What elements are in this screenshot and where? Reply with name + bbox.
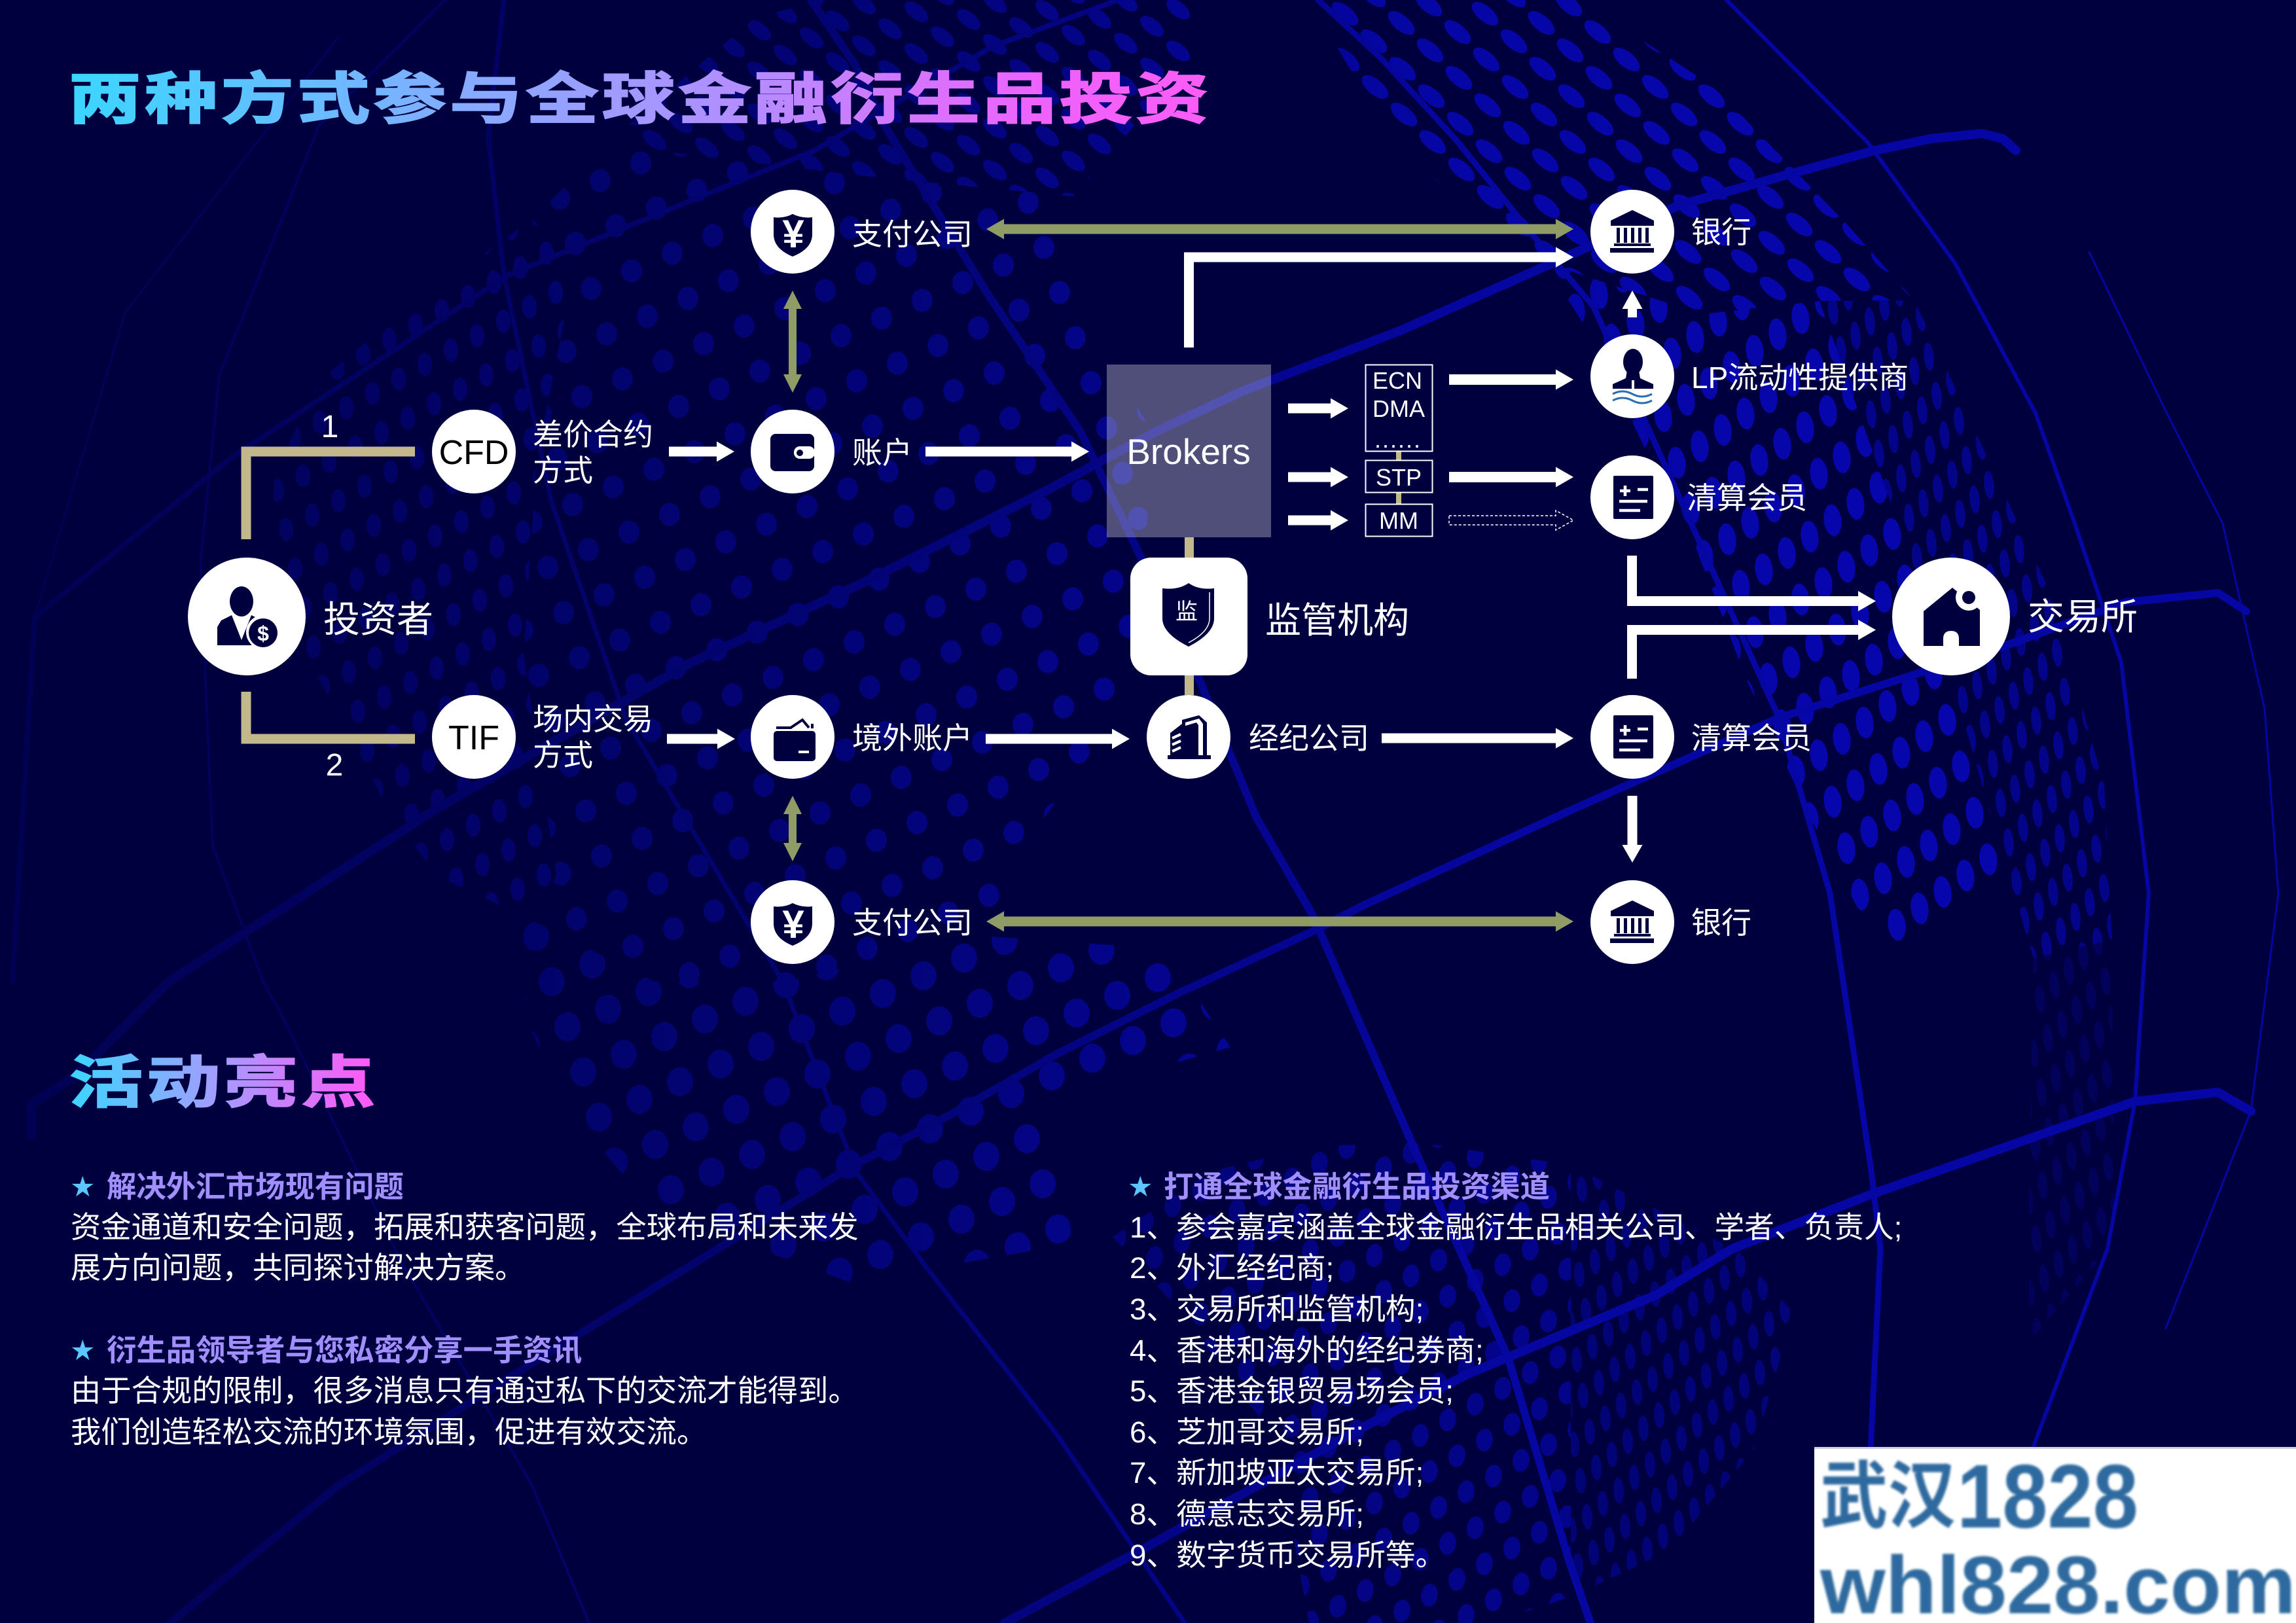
label: brokerage: 经纪公司	[1249, 721, 1369, 755]
node: payment company top: ¥	[782, 212, 804, 256]
node: TIF: TIF	[448, 719, 499, 757]
box: STP: STP	[1376, 464, 1422, 491]
text block: forex market issues: 展方向问题，共同探讨解决方案。	[71, 1251, 525, 1285]
text block: global channel list	[1128, 1170, 1902, 1572]
text block: private sharing	[70, 1334, 859, 1449]
node: payment company bottom: ¥	[782, 902, 804, 946]
label: payment company bottom: 支付公司	[852, 906, 973, 940]
text block: private sharing: 衍生品领导者与您私密分享一手资讯	[107, 1334, 582, 1367]
node: brokerage	[1147, 695, 1230, 779]
label: TIF method: 场内交易	[533, 702, 653, 736]
arrow: CFD to account	[669, 441, 734, 462]
label: TIF method	[533, 702, 653, 772]
node: investor: $	[257, 622, 269, 645]
flow diagram	[188, 190, 2138, 964]
arrow: MM to clearing member dashed	[1449, 510, 1573, 530]
watermark	[1814, 1446, 2296, 1623]
text block: private sharing: 我们创造轻松交流的环境氛围，促进有效交流。	[71, 1415, 707, 1449]
label: overseas account: 境外账户	[852, 721, 973, 755]
text block: global channel list: 3、交易所和监管机构;	[1130, 1293, 1424, 1326]
node: payment company top	[751, 190, 834, 274]
arrow: account to brokers	[925, 441, 1089, 462]
label: CFD method: 差价合约	[533, 418, 653, 452]
arrow: ECN to LP	[1449, 369, 1573, 390]
double arrow: payment company and bank top	[986, 219, 1573, 240]
label: CFD method: 方式	[533, 454, 593, 488]
node: payment company bottom	[751, 880, 834, 964]
connector: investor to CFD	[246, 452, 415, 539]
text block: global channel list: 7、新加坡亚太交易所;	[1130, 1456, 1424, 1489]
box: ECN DMA: ......	[1374, 426, 1422, 453]
connector: investor to TIF	[246, 692, 415, 739]
connector: regulator to brokerage	[1185, 675, 1194, 695]
node: account	[751, 410, 834, 493]
label: investor: 投资者	[323, 599, 433, 640]
text block: global channel list: 6、芝加哥交易所;	[1130, 1416, 1364, 1449]
node: regulator: 监	[1175, 599, 1198, 624]
panel: brokers	[1107, 365, 1271, 537]
node: CFD: CFD	[439, 434, 509, 472]
arrow: clearing member top to exchange	[1627, 556, 1876, 611]
arrow: brokers to STP	[1288, 467, 1348, 487]
node: regulator	[1130, 558, 1247, 675]
box: MM: MM	[1379, 507, 1418, 534]
label: account: 账户	[852, 436, 912, 470]
node: clearing member bottom	[1590, 695, 1674, 779]
label: regulator: 监管机构	[1265, 600, 1409, 641]
node: clearing member top	[1590, 455, 1674, 539]
box: ECN DMA	[1365, 365, 1432, 453]
text block: global channel list: 4、香港和海外的经纪券商;	[1130, 1334, 1484, 1367]
box: STP	[1365, 461, 1432, 492]
text block: global channel list: 打通全球金融衍生品投资渠道	[1164, 1170, 1550, 1204]
arrow: brokerage to clearing member	[1382, 728, 1573, 749]
watermark: 1828	[1957, 1446, 2138, 1547]
label: bank bottom: 银行	[1691, 906, 1751, 940]
arrow: overseas account to brokerage	[986, 729, 1130, 749]
text block: global channel list: ★	[1128, 1171, 1153, 1204]
node: investor	[188, 558, 306, 675]
text block: forex market issues: 解决外汇市场现有问题	[107, 1170, 404, 1204]
double arrow: overseas account and payment company	[783, 796, 802, 861]
text block: forex market issues	[70, 1170, 859, 1285]
arrow: brokers to ECN	[1288, 398, 1348, 419]
heading: highlights: 活动亮点	[69, 1052, 379, 1115]
node: LP	[1590, 334, 1674, 418]
connector: ECN to STP	[1396, 452, 1401, 460]
node: bank top	[1590, 190, 1674, 274]
node: bank bottom	[1590, 880, 1674, 964]
arrow: TIF to overseas account	[667, 729, 735, 749]
title: 两种方式参与全球金融衍生品投资	[69, 68, 1212, 130]
text block: global channel list: 9、数字货币交易所等。	[1130, 1539, 1445, 1572]
label: CFD method	[533, 418, 653, 488]
arrow: clearing member bottom to exchange	[1627, 620, 1876, 679]
label: clearing member bottom: 清算会员	[1691, 721, 1812, 755]
label: bank top: 银行	[1691, 215, 1751, 249]
arrow: clearing member to bank bottom	[1622, 796, 1643, 863]
label: route 1: 1	[321, 410, 338, 444]
text block: global channel list: 2、外汇经纪商;	[1130, 1251, 1334, 1285]
arrow: brokers to bank	[1184, 247, 1573, 348]
text block: private sharing: ★	[70, 1334, 96, 1367]
arrow: STP to clearing member	[1449, 467, 1573, 487]
text block: forex market issues: 资金通道和安全问题，拓展和获客问题，全球布局和未来发	[71, 1210, 859, 1244]
node: CFD	[432, 410, 516, 493]
label: payment company top: 支付公司	[852, 217, 973, 251]
box: ECN DMA: DMA	[1372, 395, 1425, 422]
label: LP: LP流动性提供商	[1691, 361, 1909, 395]
connector: STP to MM	[1396, 493, 1401, 504]
text block: global channel list: 8、德意志交易所;	[1130, 1497, 1364, 1531]
node: exchange	[1892, 558, 2010, 675]
text block: global channel list: 1、参会嘉宾涵盖全球金融衍生品相关公司、学者、负责人;	[1130, 1211, 1902, 1244]
box: ECN DMA: ECN	[1372, 367, 1422, 394]
arrow: LP to bank	[1622, 291, 1643, 317]
node: overseas account	[751, 695, 834, 779]
text block: private sharing: 由于合规的限制，很多消息只有通过私下的交流才能得到。	[71, 1374, 859, 1408]
label: route 2: 2	[326, 748, 343, 783]
text block: forex market issues: ★	[70, 1171, 96, 1204]
connector: brokers to regulator	[1185, 537, 1194, 558]
label: TIF method: 方式	[533, 738, 593, 772]
text block: global channel list: 5、香港金银贸易场会员;	[1130, 1374, 1454, 1408]
label: clearing member top: 清算会员	[1687, 481, 1807, 515]
arrow: brokers to MM	[1288, 510, 1348, 530]
node: TIF	[432, 695, 516, 779]
label: exchange: 交易所	[2028, 596, 2138, 637]
double arrow: account and payment company	[783, 291, 802, 393]
panel: brokers: Brokers	[1126, 431, 1251, 472]
watermark: 武汉	[1820, 1455, 1956, 1537]
double arrow: payment company and bank bottom	[986, 911, 1573, 932]
box: MM	[1365, 504, 1432, 537]
